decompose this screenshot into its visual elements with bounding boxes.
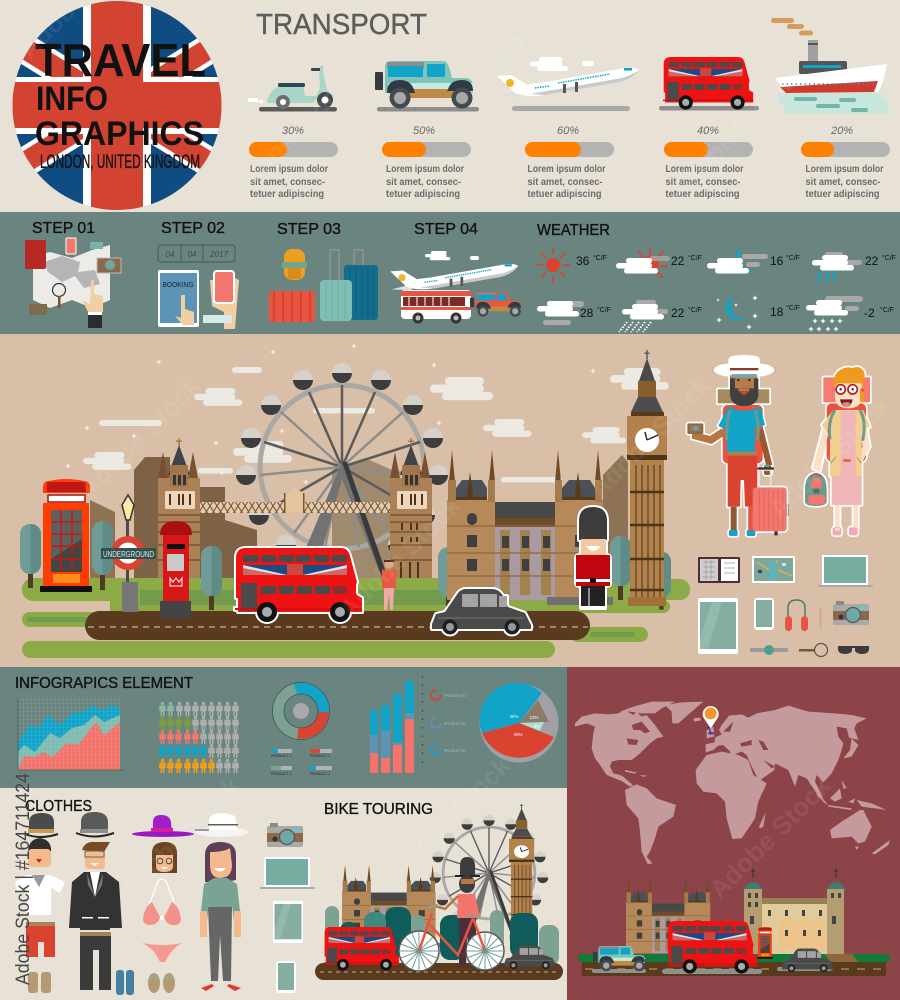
stat: bus 40%: 40%: [697, 125, 719, 137]
street lamp and underground sign: [101, 495, 156, 612]
stat: scooter 30%: tetuer adipiscing: [250, 188, 324, 200]
step 01: plan with map: STEP 01: [32, 220, 95, 237]
travel items: magnifying glass: [799, 644, 828, 656]
ring indicators: PRODUCT 02: [444, 722, 466, 726]
clothes: bikini bottom: [142, 943, 182, 962]
pedestrian: [382, 560, 396, 610]
map panel: city scene: [578, 868, 890, 976]
ring indicators: [431, 690, 466, 755]
travel items: watch: [750, 645, 788, 655]
clothes: girl head: [152, 842, 177, 873]
weather: storm cloud 22: 22: [865, 254, 879, 268]
stat: airplane 60%: sit amet, consec-: [528, 176, 603, 188]
title badge with union flag: LONDON, UNITED KINGDOM: [40, 152, 200, 173]
donut chart legend: PRODUCT 1: [310, 754, 330, 758]
clothes: purple hat: [132, 815, 194, 837]
weather: sun and cloud 22: °C/F: [688, 254, 702, 262]
landmark: Tower Bridge: [158, 438, 432, 583]
donut chart legend: PRODUCT 1: [271, 754, 291, 758]
faint repeated watermarks: Adobe Stock: [703, 770, 837, 904]
clothes: phone: [276, 961, 296, 993]
title badge with union flag: GRAPHICS: [35, 115, 204, 153]
stat: bus 40%: sit amet, consec-: [666, 176, 741, 188]
landmark: red phone box: [40, 479, 92, 592]
street lamp and underground sign: UNDERGROUND: [103, 550, 154, 559]
travel items: folded map: [752, 556, 795, 583]
bike touring scene: [315, 804, 563, 980]
ground: green lawns: [22, 578, 690, 658]
clothes: man with suit: [69, 812, 134, 995]
step 02: booking: 04: [188, 250, 197, 259]
trees: [20, 521, 671, 611]
weather: sunny 36: 36: [576, 254, 590, 268]
clothes: bikini top: [143, 879, 181, 925]
clothes: white sun hat: [195, 813, 249, 837]
weather: storm cloud 22: [812, 252, 896, 281]
ground: road: [85, 611, 590, 640]
stat: ship 20%: sit amet, consec-: [806, 176, 881, 188]
travel items: camera: [833, 601, 869, 625]
stacked bar chart: [370, 676, 422, 773]
stat: ship 20%: tetuer adipiscing: [806, 188, 880, 200]
travel items: sunglasses: [838, 646, 869, 654]
traveller man: [687, 357, 788, 536]
travel items: pencil: [820, 608, 822, 627]
weather: night cloud 16: 16: [770, 254, 784, 268]
step 04: flights and road transfer: STEP 04: [414, 221, 478, 238]
faint repeated watermarks: Adobe Stock: [763, 390, 897, 524]
panel: transport background: [0, 0, 900, 212]
title badge with union flag: TRAVEL: [35, 34, 206, 86]
weather: snow -2: -2: [864, 306, 875, 320]
heading: clothes: CLOTHES: [25, 798, 92, 815]
palace of Westminster: [447, 450, 613, 605]
weather: night cloud 16: °C/F: [786, 254, 800, 262]
step 02: booking: STEP 02: [161, 220, 225, 237]
weather: cloudy 28: [537, 301, 611, 325]
panel: steps band background: [0, 212, 900, 334]
clothes: man with casual outfit: [15, 813, 65, 993]
pie chart: 40%: [513, 732, 523, 737]
stat: scooter 30%: 30%: [282, 125, 304, 137]
weather: clear night 18: 18: [770, 305, 784, 319]
double-decker bus with white outline: [235, 548, 362, 622]
pie chart: 12%: [529, 715, 539, 720]
clothes: sandals: [148, 973, 175, 993]
weather: sun and cloud 22: [616, 248, 702, 278]
donut chart legend: PRODUCT 1: [271, 772, 291, 776]
faint repeated watermarks: Adobe Stock: [583, 370, 717, 504]
step 01: plan with map: [25, 220, 121, 328]
stat: scooter 30%: sit amet, consec-: [250, 176, 325, 188]
clothes: laptop: [260, 857, 315, 889]
heading: transport: TRANSPORT: [256, 9, 427, 41]
stat: jeep 50%: 50%: [413, 125, 435, 137]
black taxi with white outline: [432, 589, 531, 634]
pie chart: 8%: [534, 724, 540, 729]
travel items: laptop: [818, 555, 873, 587]
clothes: camera: [267, 823, 303, 847]
stat: bus 40%: [664, 125, 753, 200]
donut chart: [272, 682, 330, 740]
world map with pin: [575, 702, 890, 864]
stat: jeep 50%: [382, 125, 471, 200]
travel items: headphones: [785, 600, 808, 631]
stat: scooter 30%: Lorem ipsum dolor: [250, 163, 328, 175]
donut chart legend: [271, 749, 332, 776]
faint repeated watermarks: Adobe Stock: [223, 70, 357, 204]
step 03: luggage: [269, 221, 378, 322]
heading: infographics element: INFOGRAPICS ELEMENT: [15, 675, 193, 692]
faint repeated watermarks: Adobe Stock: [113, 770, 247, 904]
step 02: booking: 2017: [209, 250, 228, 259]
icon: ship: [771, 18, 888, 114]
panel: London scene background: [0, 334, 900, 667]
faint repeated watermarks: Adobe Stock: [383, 750, 517, 884]
faint repeated watermarks: Adobe Stock: [663, 70, 797, 204]
weather: rain 22: [619, 300, 702, 332]
stat: jeep 50%: tetuer adipiscing: [386, 188, 460, 200]
landmark: London Eye: [236, 363, 448, 578]
travel items: notebook: [698, 557, 740, 583]
panel: clothes and bike touring background: [0, 788, 567, 1000]
icon: double-decker bus: [659, 57, 759, 110]
London scene: sky clouds and stars: [65, 343, 669, 497]
royal guard: [576, 507, 610, 608]
heading: weather: WEATHER: [537, 222, 610, 239]
landmark: Big Ben: [627, 350, 667, 606]
donut chart legend: PRODUCT 1: [310, 772, 330, 776]
travel items: tablet: [698, 598, 738, 654]
stat: airplane 60%: tetuer adipiscing: [528, 188, 602, 200]
heading: bike touring: BIKE TOURING: [324, 801, 433, 818]
weather: clear night 18: °C/F: [786, 304, 800, 312]
stat: jeep 50%: Lorem ipsum dolor: [386, 163, 464, 175]
stat: scooter 30%: [249, 125, 338, 200]
stat: ship 20%: [801, 125, 890, 200]
icon: airplane: [497, 57, 639, 111]
title badge with union flag: INFO: [36, 80, 108, 118]
clothes: tablet: [273, 901, 303, 943]
weather: clear night 18: [716, 295, 800, 330]
panel: world map background: [567, 667, 900, 1000]
panel: infographic elements background: [0, 667, 567, 788]
ring indicators: PRODUCT 01: [444, 694, 466, 698]
stat: airplane 60%: Lorem ipsum dolor: [528, 163, 606, 175]
stat: jeep 50%: sit amet, consec-: [386, 176, 461, 188]
weather: cloudy 28: 28: [580, 306, 594, 320]
ring indicators: PRODUCT 03: [444, 749, 466, 753]
weather: rain 22: °C/F: [688, 306, 702, 314]
weather: snow -2: [806, 296, 894, 332]
step 03: luggage: STEP 03: [277, 221, 341, 238]
faint repeated watermarks: Adobe Stock: [73, 370, 207, 504]
weather: cloudy 28: °C/F: [597, 306, 611, 314]
stat: ship 20%: Lorem ipsum dolor: [806, 163, 884, 175]
pictogram chart: [159, 702, 239, 773]
London scene: background buildings: [90, 455, 628, 600]
stat: airplane 60%: [525, 125, 614, 200]
faint repeated watermarks: Adobe Stock: [333, 490, 467, 624]
stat: bus 40%: Lorem ipsum dolor: [666, 163, 744, 175]
area chart: [18, 698, 124, 770]
travel items: phone: [754, 598, 774, 630]
pie chart: 40%: [509, 714, 519, 719]
title badge with union flag: [12, 1, 222, 210]
weather: snow -2: °C/F: [880, 306, 894, 314]
weather: rain 22: 22: [671, 306, 685, 320]
weather: storm cloud 22: °C/F: [882, 254, 896, 262]
pie chart: [480, 683, 558, 762]
step 04: flights and road transfer: [390, 221, 521, 324]
step 02: booking: BOOKING: [162, 280, 194, 289]
weather: sun and cloud 22: 22: [671, 254, 685, 268]
weather: sunny 36: [536, 248, 607, 283]
weather: sunny 36: °C/F: [593, 254, 607, 262]
icon: scooter: [248, 66, 337, 112]
step 02: booking: 04: [166, 250, 175, 259]
red post box: [160, 521, 192, 618]
traveller woman: [805, 367, 870, 535]
stat: airplane 60%: 60%: [557, 125, 579, 137]
stock watermark rotated text: Adobe Stock | #164711424: [13, 773, 34, 985]
stat: ship 20%: 20%: [830, 125, 853, 137]
step 02: booking: [158, 220, 239, 329]
weather: night cloud 16: [707, 248, 800, 274]
icon: jeep: [375, 61, 479, 112]
clothes: woman: [200, 842, 241, 991]
stat: bus 40%: tetuer adipiscing: [666, 188, 740, 200]
